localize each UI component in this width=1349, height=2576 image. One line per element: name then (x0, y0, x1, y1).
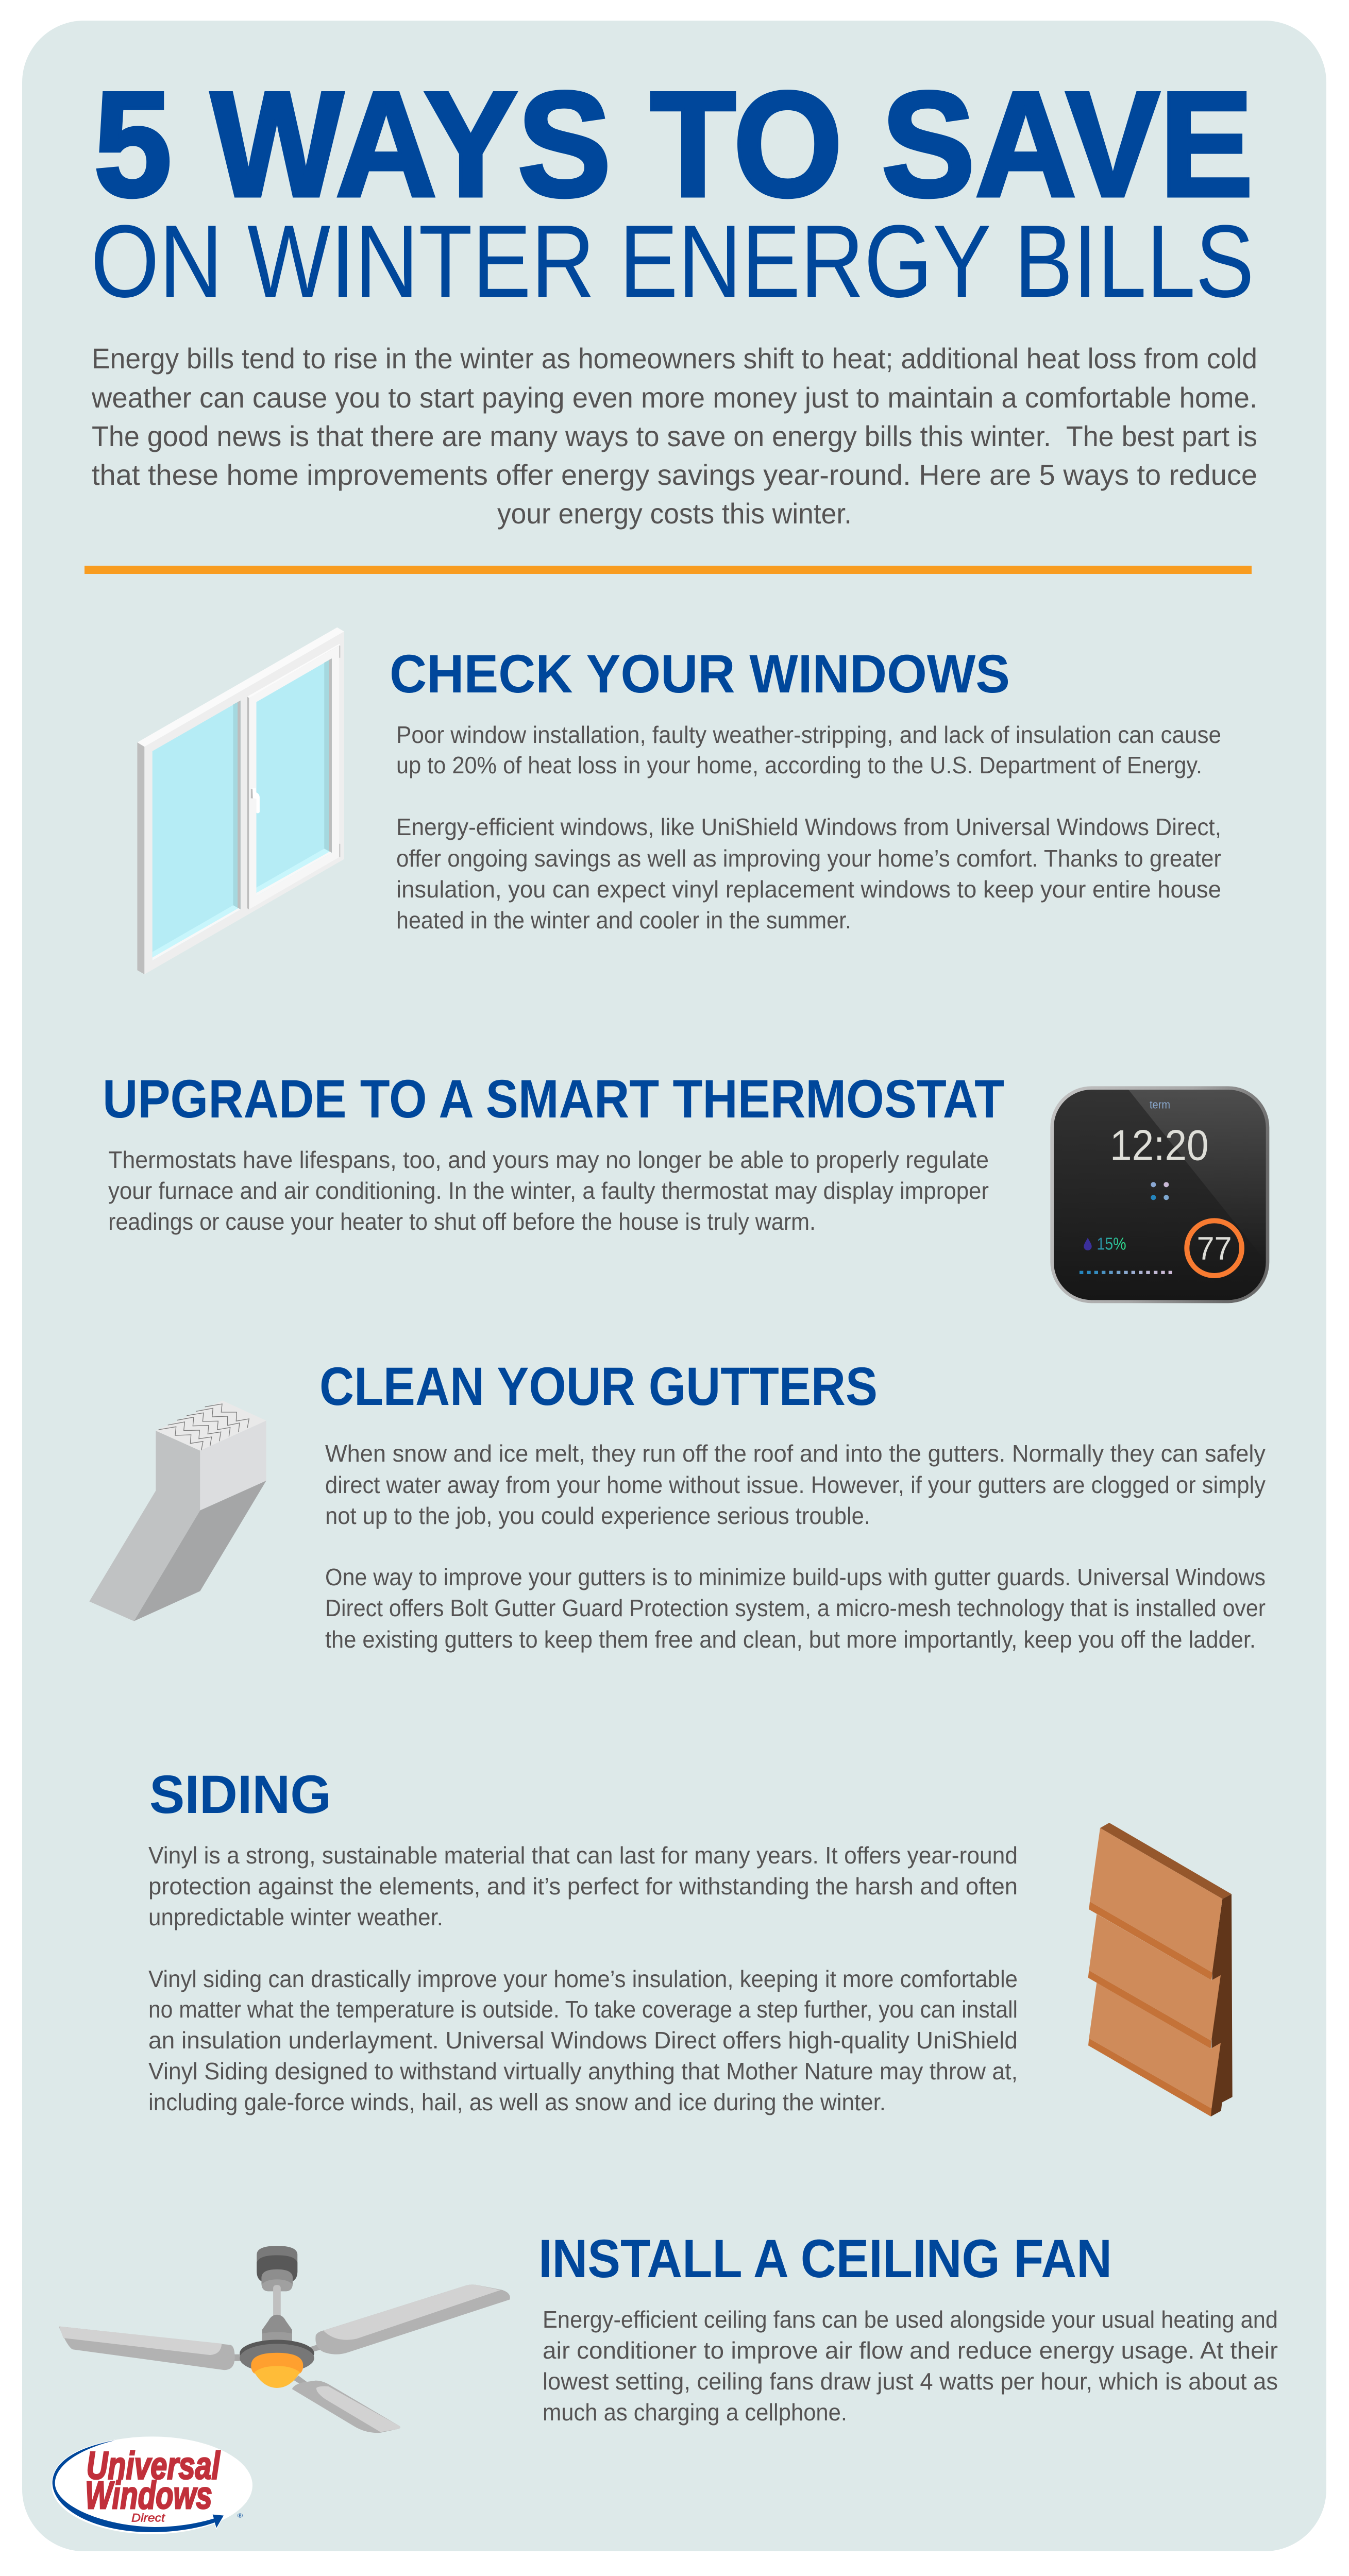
icon: siding boards (1088, 1823, 1233, 2116)
heading: CLEAN YOUR GUTTERS (319, 1357, 878, 1417)
body text (148, 1842, 1018, 2115)
section: check your windows (137, 628, 1221, 974)
body text (396, 721, 1221, 934)
intro paragraph: your energy costs this winter. (497, 497, 852, 530)
title line 1: 5 WAYS TO SAVE (94, 61, 1253, 228)
section: ceiling fan (59, 2229, 1278, 2433)
body text: an insulation underlayment. Universal Windows Direct offers high-quality UniShield (148, 2027, 1018, 2054)
icon: thermostat (1050, 1086, 1269, 1303)
body text: the existing gutters to keep them free and clean, but more importantly, keep you off the ladder. (325, 1626, 1256, 1653)
section: clean your gutters (89, 1357, 1266, 1653)
icon: thermostat: 77 (1197, 1231, 1232, 1267)
intro paragraph: Energy bills tend to rise in the winter as homeowners shift to heat; additional heat loss from cold (92, 342, 1257, 375)
intro paragraph: The good news is that there are many ways to save on energy bills this winter. The best part is (92, 420, 1257, 452)
body text: not up to the job, you could experience serious trouble. (325, 1502, 870, 1529)
body text: Thermostats have lifespans, too, and yours may no longer be able to properly regulate (108, 1146, 989, 1173)
body text: including gale-force winds, hail, as well as snow and ice during the winter. (148, 2089, 886, 2115)
body text: direct water away from your home without issue. However, if your gutters are clogged or simply (325, 1471, 1266, 1498)
body text (325, 1440, 1266, 1653)
logo: Universal Windows Direct: Universal (87, 2444, 221, 2487)
body text: Energy-efficient ceiling fans can be used alongside your usual heating and (543, 2306, 1278, 2333)
body text: readings or cause your heater to shut off before the house is truly warm. (108, 1208, 816, 1235)
logo: Universal Windows Direct: Direct (131, 2511, 165, 2524)
icon: thermostat: 12:20 (1110, 1122, 1209, 1170)
body text: insulation, you can expect vinyl replacement windows to keep your entire house (396, 876, 1221, 903)
body text: lowest setting, ceiling fans draw just 4 watts per hour, which is about as (543, 2368, 1278, 2395)
body text: Vinyl siding can drastically improve your home’s insulation, keeping it more comfortable (148, 1965, 1018, 1992)
body text: protection against the elements, and it’s perfect for withstanding the harsh and often (148, 1873, 1018, 1900)
icon: thermostat: term (1150, 1098, 1170, 1111)
body text: Direct offers Bolt Gutter Guard Protection system, a micro-mesh technology that is installed over (325, 1595, 1266, 1621)
body text: One way to improve your gutters is to minimize build-ups with gutter guards. Universal Windows (325, 1564, 1266, 1590)
intro paragraph (91, 342, 1257, 530)
icon: thermostat: 15% (1097, 1235, 1126, 1254)
section: smart thermostat (103, 1069, 1269, 1303)
body text: Vinyl Siding designed to withstand virtually anything that Mother Nature may throw at, (148, 2058, 1018, 2084)
body text: Energy-efficient windows, like UniShield Windows from Universal Windows Direct, (396, 814, 1221, 840)
body text (543, 2306, 1278, 2426)
body text: no matter what the temperature is outside. To take coverage a step further, you can install (148, 1996, 1018, 2023)
body text: up to 20% of heat loss in your home, according to the U.S. Department of Energy. (396, 752, 1202, 778)
intro paragraph: that these home improvements offer energy savings year-round. Here are 5 ways to reduce (92, 459, 1257, 491)
logo: Universal Windows Direct: ® (238, 2513, 243, 2519)
body text: unpredictable winter weather. (148, 1904, 443, 1930)
intro paragraph: weather can cause you to start paying even more money just to maintain a comfortable home. (91, 381, 1257, 414)
body text (108, 1146, 989, 1235)
body text: Poor window installation, faulty weather-stripping, and lack of insulation can cause (396, 721, 1221, 748)
icon: ceiling fan (59, 2246, 510, 2433)
body text: much as charging a cellphone. (543, 2399, 847, 2426)
logo: Universal Windows Direct: Windows (85, 2473, 212, 2517)
logo: Universal Windows Direct (52, 2436, 252, 2534)
heading: INSTALL A CEILING FAN (538, 2229, 1112, 2289)
body text: heated in the winter and cooler in the summer. (396, 907, 851, 934)
heading: CHECK YOUR WINDOWS (390, 644, 1010, 704)
icon: window (137, 628, 344, 974)
body text: air conditioner to improve air flow and reduce energy usage. At their (543, 2337, 1278, 2364)
body text: When snow and ice melt, they run off the roof and into the gutters. Normally they can safely (325, 1440, 1266, 1467)
heading: UPGRADE TO A SMART THERMOSTAT (103, 1069, 1004, 1129)
body text: offer ongoing savings as well as improving your home’s comfort. Thanks to greater (396, 845, 1221, 872)
body text: your furnace and air conditioning. In the winter, a faulty thermostat may display improper (108, 1177, 989, 1204)
heading: SIDING (149, 1765, 331, 1825)
section: siding (148, 1765, 1233, 2116)
divider: orange bar (85, 566, 1252, 574)
title (91, 61, 1254, 319)
icon: gutter (89, 1400, 266, 1621)
body text: Vinyl is a strong, sustainable material that can last for many years. It offers year-round (148, 1842, 1018, 1869)
